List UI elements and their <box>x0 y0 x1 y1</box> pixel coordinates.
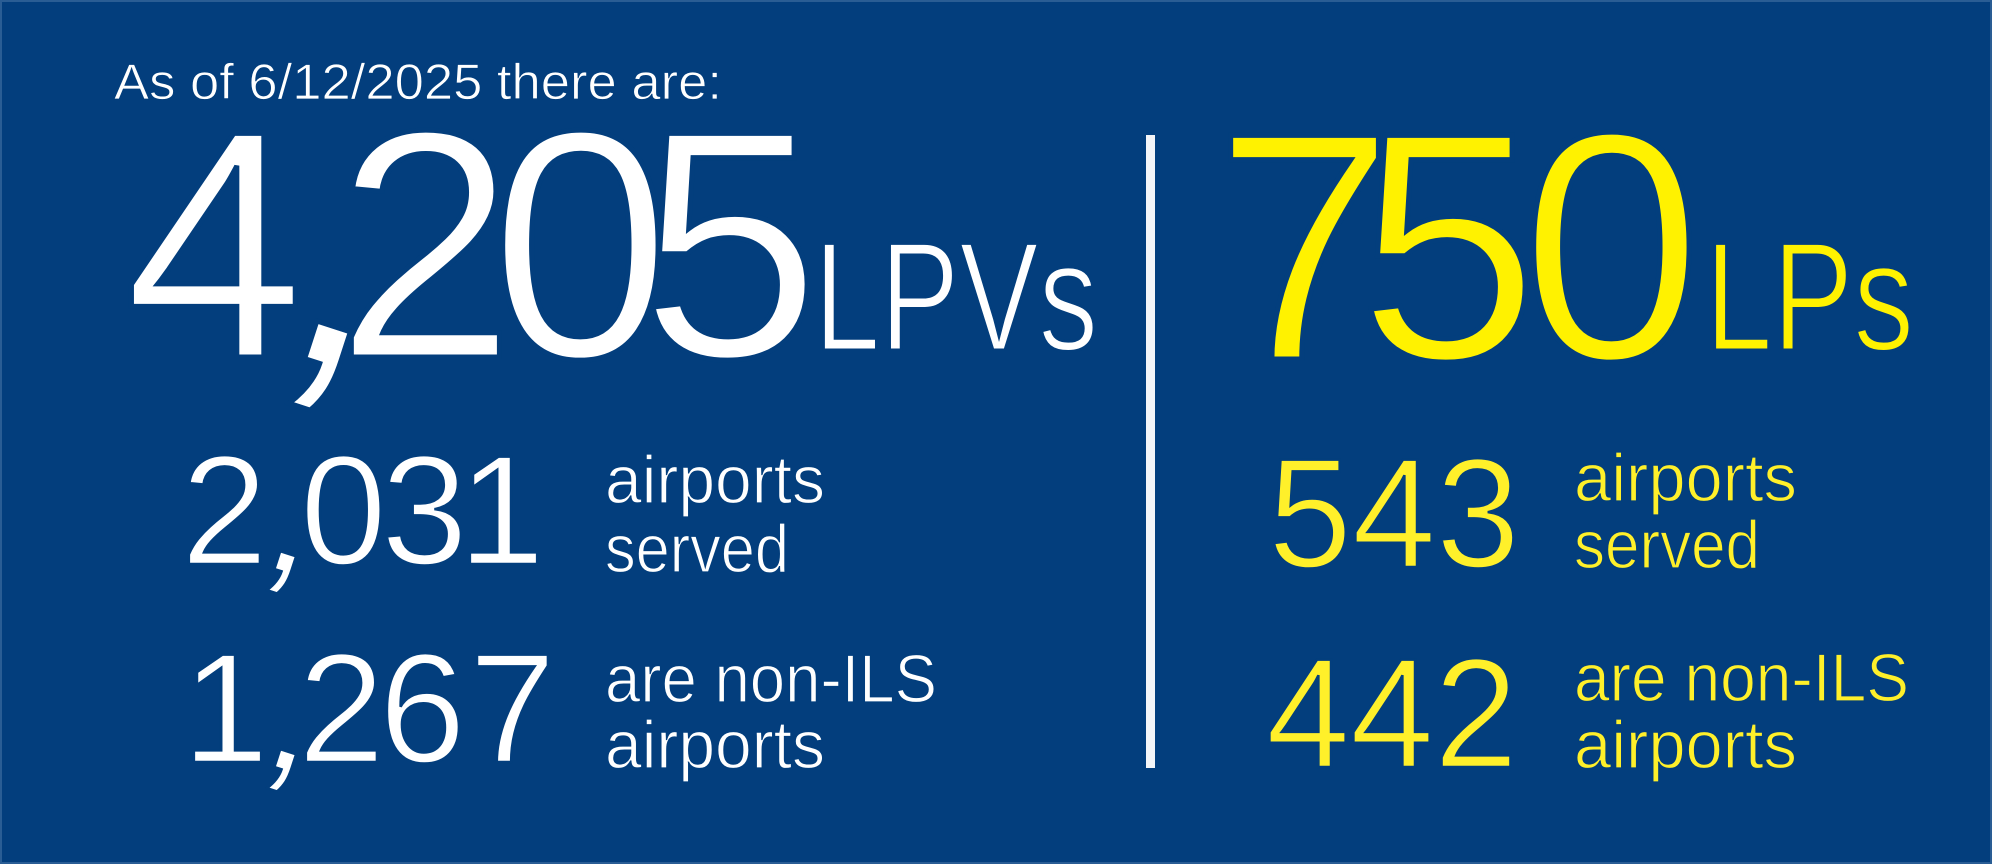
stat: 2,031 airports served: airports <box>605 442 825 518</box>
divider <box>1146 135 1155 768</box>
stat: 1,267 non-ILS airports <box>182 613 937 813</box>
big number: 750 LPs: 5 <box>1358 65 1539 428</box>
stat: 442 non-ILS airports: are non-ILS <box>1574 640 1909 716</box>
stat: 2,031 airports served: 3 <box>381 424 468 598</box>
stat: 2,031 airports served: , <box>247 415 354 615</box>
panel: LPV statistics <box>124 30 1098 813</box>
stat: 442 non-ILS airports <box>1266 627 1909 801</box>
stat: 1,267 non-ILS airports: airports <box>605 707 825 783</box>
stat: 1,267 non-ILS airports: , <box>247 613 354 813</box>
big number: 4,205 LPVs: 2 <box>335 63 516 426</box>
stat: 1,267 non-ILS airports: 1 <box>182 622 269 796</box>
big number: 750 LPs: 7 <box>1214 65 1395 428</box>
stat: 442 non-ILS airports: airports <box>1574 707 1797 783</box>
stat: 1,267 non-ILS airports: are non-ILS <box>605 641 937 717</box>
big number: 4,205 LPVs <box>124 30 1098 455</box>
heading: date line: As of 6/12/2025 there are: <box>114 54 722 110</box>
stat: 2,031 airports served <box>181 415 825 615</box>
stat: 543 airports served: served <box>1574 507 1760 583</box>
big number: 750 LPs: 0 <box>1521 65 1702 428</box>
stat: 442 non-ILS airports: 442 <box>1266 627 1518 801</box>
panel: LP statistics <box>1214 65 1914 801</box>
stat: 1,267 non-ILS airports: 6 <box>379 622 466 796</box>
stat: 543 airports served <box>1268 427 1797 601</box>
stat: 1,267 non-ILS airports: 2 <box>298 622 385 796</box>
big number: 4,205 LPVs: , <box>248 30 473 455</box>
stat: 543 airports served: airports <box>1574 440 1797 516</box>
stat: 2,031 airports served: 0 <box>300 424 387 598</box>
stat: 2,031 airports served: 1 <box>458 424 545 598</box>
big number: 4,205 LPVs: LPVs <box>814 210 1098 383</box>
big number: 750 LPs <box>1214 65 1914 428</box>
big number: 4,205 LPVs: 5 <box>640 63 821 426</box>
stat: 2,031 airports served: 2 <box>181 424 268 598</box>
stat: 543 airports served: 543 <box>1268 427 1520 601</box>
big number: 4,205 LPVs: 4 <box>124 63 305 426</box>
big number: 4,205 LPVs: 0 <box>490 63 671 426</box>
stat: 1,267 non-ILS airports: 7 <box>469 622 556 796</box>
stat: 2,031 airports served: served <box>605 511 789 587</box>
big number: 750 LPs: LPs <box>1705 210 1914 383</box>
